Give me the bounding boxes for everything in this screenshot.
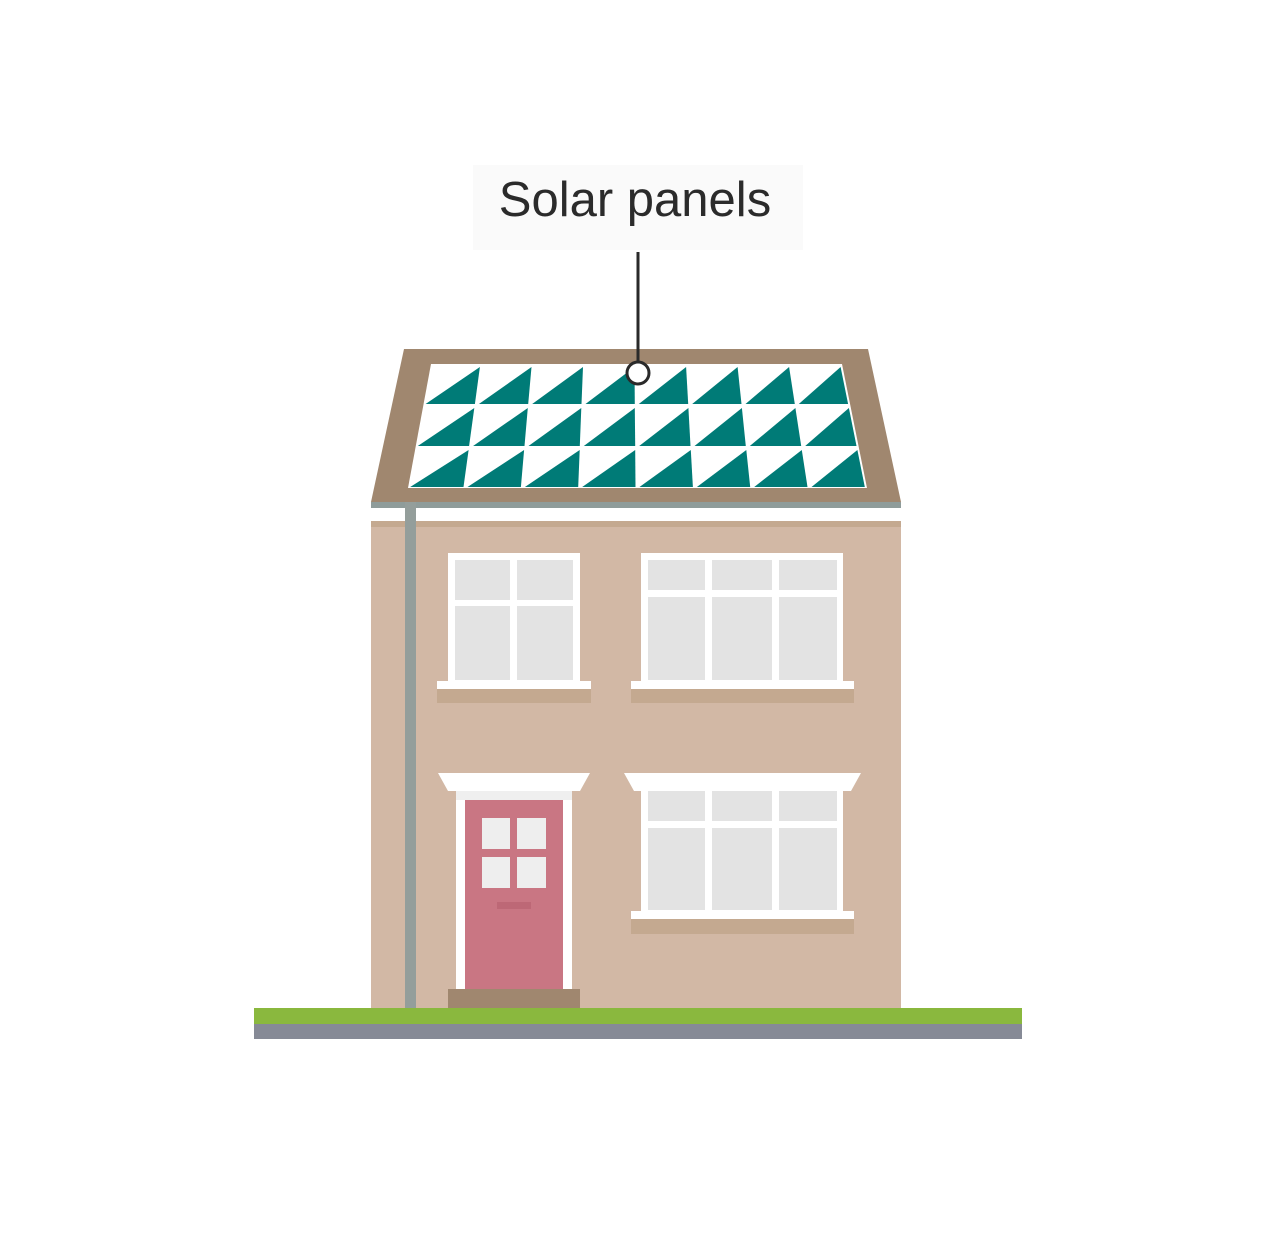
upper left window — [437, 553, 591, 703]
pointer line — [627, 252, 649, 384]
house wall — [371, 502, 901, 1008]
label: solar panels: Solar panels — [499, 173, 771, 227]
solar panel array — [408, 364, 867, 488]
downpipe — [405, 502, 416, 1008]
upper right window — [631, 553, 854, 703]
label: solar panels — [473, 165, 803, 250]
roof — [371, 349, 901, 502]
front door — [438, 773, 590, 1008]
lower right window — [624, 773, 861, 934]
ground — [254, 1008, 1022, 1039]
